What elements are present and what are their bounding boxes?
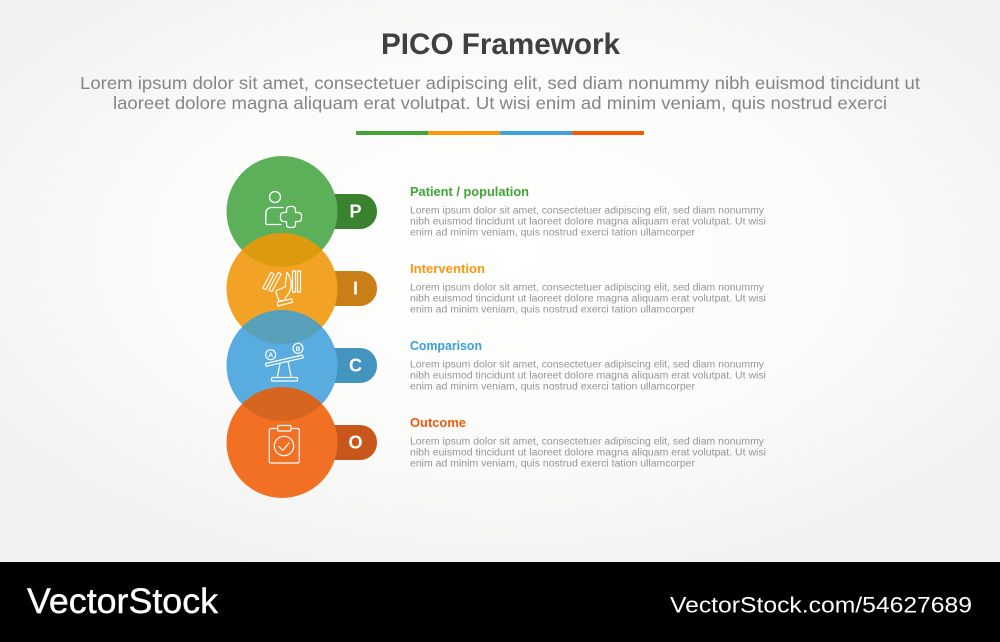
icon: hand with bars xyxy=(263,271,300,306)
item: Patient / population xyxy=(410,184,766,238)
letter tab O: O xyxy=(348,432,363,452)
item: Outcome: enim ad minim veniam, quis nostrud exerci tation ullamcorper xyxy=(410,458,696,470)
letter tab C: C xyxy=(349,356,362,376)
item: Comparison: Lorem ipsum dolor sit amet, consectetuer adipiscing elit, sed diam nonummy xyxy=(410,360,764,370)
overlap I and C xyxy=(242,310,322,344)
item: Intervention xyxy=(410,261,766,316)
item: Comparison xyxy=(410,338,766,392)
letter tab P: P xyxy=(349,202,362,222)
letter tab O xyxy=(315,425,377,460)
subtitle text: laoreet dolore magna aliquam erat volutpat. Ut wisi enim ad minim veniam, quis nostrud exerci xyxy=(113,93,887,113)
footer band xyxy=(0,562,1000,642)
letter tab C xyxy=(315,348,377,383)
circle C xyxy=(226,310,338,421)
footer band: VectorStock.com/54627689 xyxy=(670,592,972,618)
item: Intervention: Lorem ipsum dolor sit amet, consectetuer adipiscing elit, sed diam nonummy xyxy=(410,282,764,294)
four-colour divider bar xyxy=(356,131,644,135)
letter tab I: I xyxy=(353,278,358,298)
item: Intervention: enim ad minim veniam, quis nostrud exerci tation ullamcorper xyxy=(410,304,696,316)
icon: clipboard with check xyxy=(269,426,299,463)
footer band: VectorStock xyxy=(27,582,219,621)
item: Outcome: Outcome xyxy=(410,415,466,430)
overlap P and I xyxy=(242,233,322,267)
item: Intervention: Intervention xyxy=(410,261,485,276)
letter tab P xyxy=(315,194,377,229)
title: PICO Framework xyxy=(381,28,620,61)
item: Outcome: Lorem ipsum dolor sit amet, consectetuer adipiscing elit, sed diam nonummy xyxy=(410,436,764,448)
item: Outcome: nibh euismod tincidunt ut laoreet dolore magna aliquam erat volutpat. Ut wisi xyxy=(410,448,766,458)
item: Outcome xyxy=(410,415,766,470)
circle P xyxy=(226,156,338,267)
icon: balance scale with A and B xyxy=(266,343,303,381)
circle I xyxy=(226,233,338,344)
subtitle text: Lorem ipsum dolor sit amet, consectetuer adipiscing elit, sed diam nonummy nibh euismod tincidunt ut xyxy=(80,73,920,93)
icon: balance scale with A and B: A xyxy=(268,352,273,359)
item: Comparison: enim ad minim veniam, quis nostrud exerci tation ullamcorper xyxy=(410,382,696,392)
icon: balance scale with A and B: B xyxy=(296,346,301,353)
item: Patient / population: nibh euismod tincidunt ut laoreet dolore magna aliquam erat volutpat. Ut wisi xyxy=(410,216,766,228)
subtitle text xyxy=(80,73,920,113)
letter tab I xyxy=(315,271,377,306)
item: Intervention: nibh euismod tincidunt ut laoreet dolore magna aliquam erat volutpat. Ut wisi xyxy=(410,294,766,304)
overlap C and O xyxy=(242,387,322,421)
item: Comparison: nibh euismod tincidunt ut laoreet dolore magna aliquam erat volutpat. Ut wisi xyxy=(410,370,766,382)
item: Patient / population: Lorem ipsum dolor sit amet, consectetuer adipiscing elit, sed diam nonummy xyxy=(410,206,764,216)
item: Patient / population: Patient / population xyxy=(410,184,529,199)
circle O xyxy=(226,387,338,498)
item: Comparison: Comparison xyxy=(410,338,482,353)
item: Patient / population: enim ad minim veniam, quis nostrud exerci tation ullamcorper xyxy=(410,228,696,238)
icon: patient with medical cross xyxy=(266,192,302,228)
